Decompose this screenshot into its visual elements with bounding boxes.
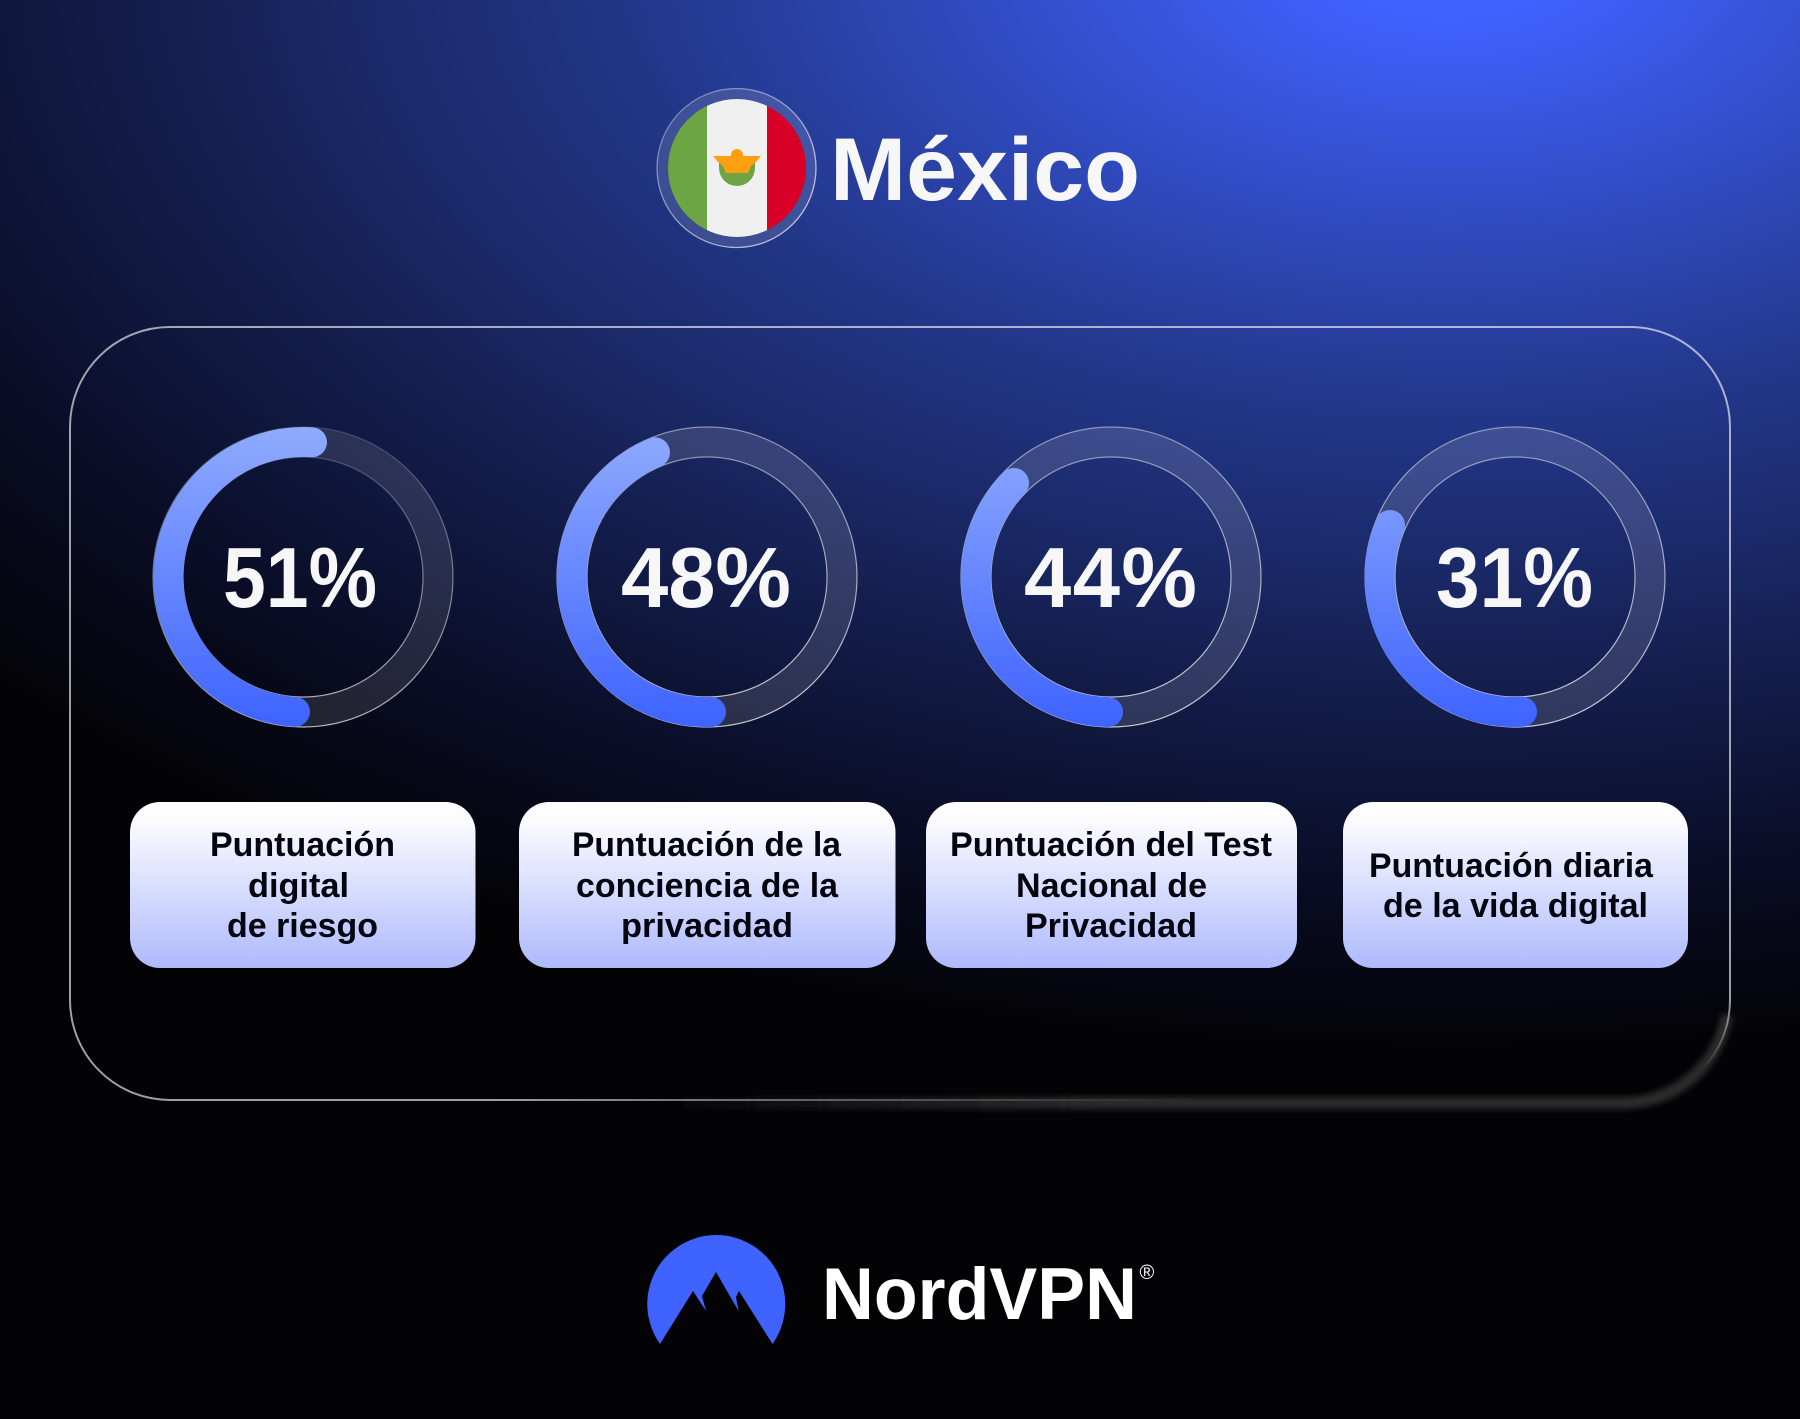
registered mark: ® <box>1140 1262 1154 1284</box>
label card: Puntuación digital de riesgo <box>130 802 476 968</box>
icon: NordVPN mountain mark <box>647 1235 785 1344</box>
footer: NordVPN logo <box>647 1235 1154 1344</box>
label card: Puntuación de la conciencia de la privacidad <box>519 802 896 968</box>
label card: Puntuación de la conciencia de la privacidad: Puntuación de la <box>572 826 842 864</box>
label card: Puntuación digital de riesgo: digital <box>248 867 349 905</box>
gauge: 48% <box>557 427 857 727</box>
label card: Puntuación digital de riesgo: Puntuación <box>210 826 395 864</box>
panel: scores container <box>70 327 1730 1103</box>
label card: Puntuación del Test Nacional de Privacidad <box>926 802 1297 968</box>
header: flag and country name <box>657 88 1140 248</box>
label card: Puntuación diaria de la vida digital <box>1343 802 1688 968</box>
gauge: 44% <box>961 427 1261 727</box>
label card: Puntuación del Test Nacional de Privacidad: Nacional de <box>1016 867 1207 905</box>
gauge: 31% <box>1365 427 1665 727</box>
title: country name: México <box>830 119 1140 219</box>
label card: Puntuación del Test Nacional de Privacidad: Puntuación del Test <box>950 826 1272 864</box>
label card: Puntuación de la conciencia de la privacidad: privacidad <box>621 907 793 945</box>
label card: Puntuación diaria de la vida digital: Puntuación diaria <box>1369 847 1654 885</box>
label card: Puntuación del Test Nacional de Privacidad: Privacidad <box>1025 907 1197 945</box>
gauge: 51% <box>153 427 453 727</box>
wordmark: NordVPN <box>822 1254 1137 1335</box>
gauge: 51%: 51% <box>223 531 377 626</box>
gauge: 31%: 31% <box>1436 531 1593 626</box>
gauge: 48%: 48% <box>621 531 791 626</box>
icon: Mexican flag badge <box>657 88 816 248</box>
label card: Puntuación digital de riesgo: de riesgo <box>227 907 378 945</box>
gauge: 44%: 44% <box>1024 531 1197 626</box>
label card: Puntuación de la conciencia de la privacidad: conciencia de la <box>576 867 839 905</box>
label card: Puntuación diaria de la vida digital: de la vida digital <box>1383 887 1648 925</box>
